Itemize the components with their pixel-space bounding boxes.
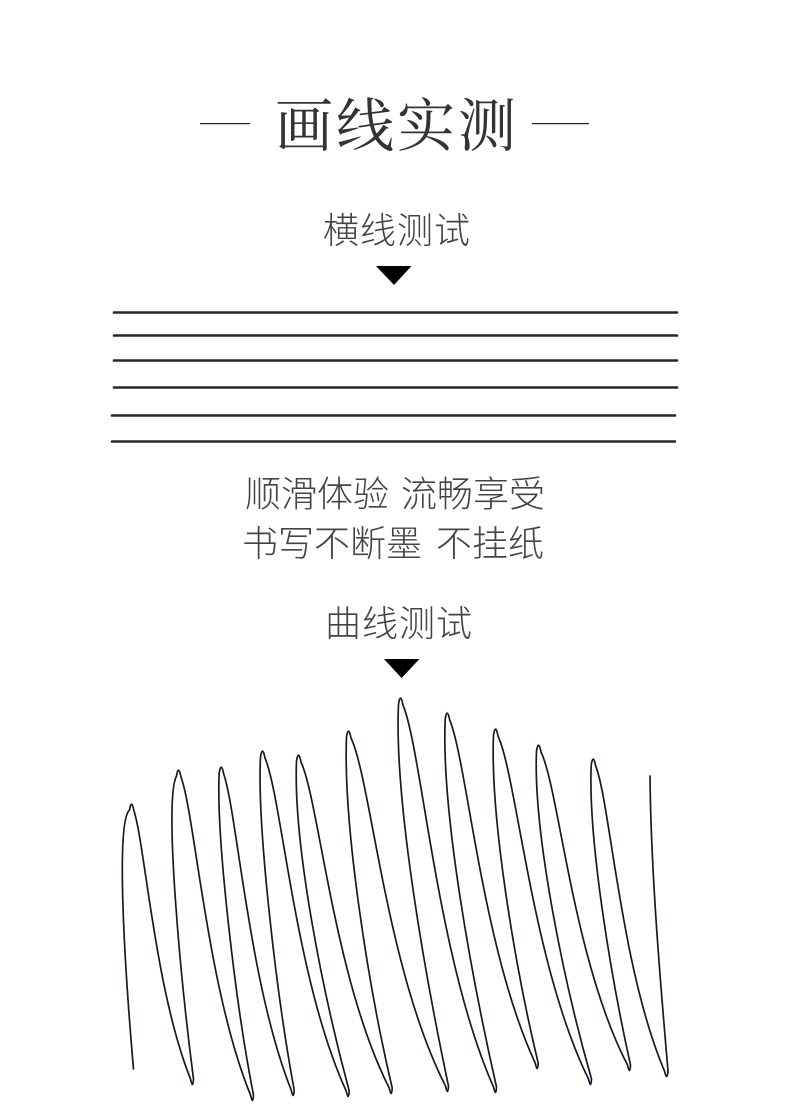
heading: curve test: 曲线测试 [325,603,473,644]
chart: horizontal pen lines [112,312,677,442]
title: 画线实测 [275,94,519,159]
heading: horizontal line test: 横线测试 [323,210,471,251]
icon: down arrow [376,266,412,285]
chart: curved pen scribble [122,698,668,1100]
text block: smooth writing claims: 顺滑体验 [245,474,389,514]
text block: smooth writing claims: 流畅享受 [401,474,545,514]
icon: down arrow [384,659,420,678]
text block: smooth writing claims: 不挂纸 [436,523,544,564]
text block: smooth writing claims: 书写不断墨 [242,523,422,564]
text block: smooth writing claims [242,474,545,564]
